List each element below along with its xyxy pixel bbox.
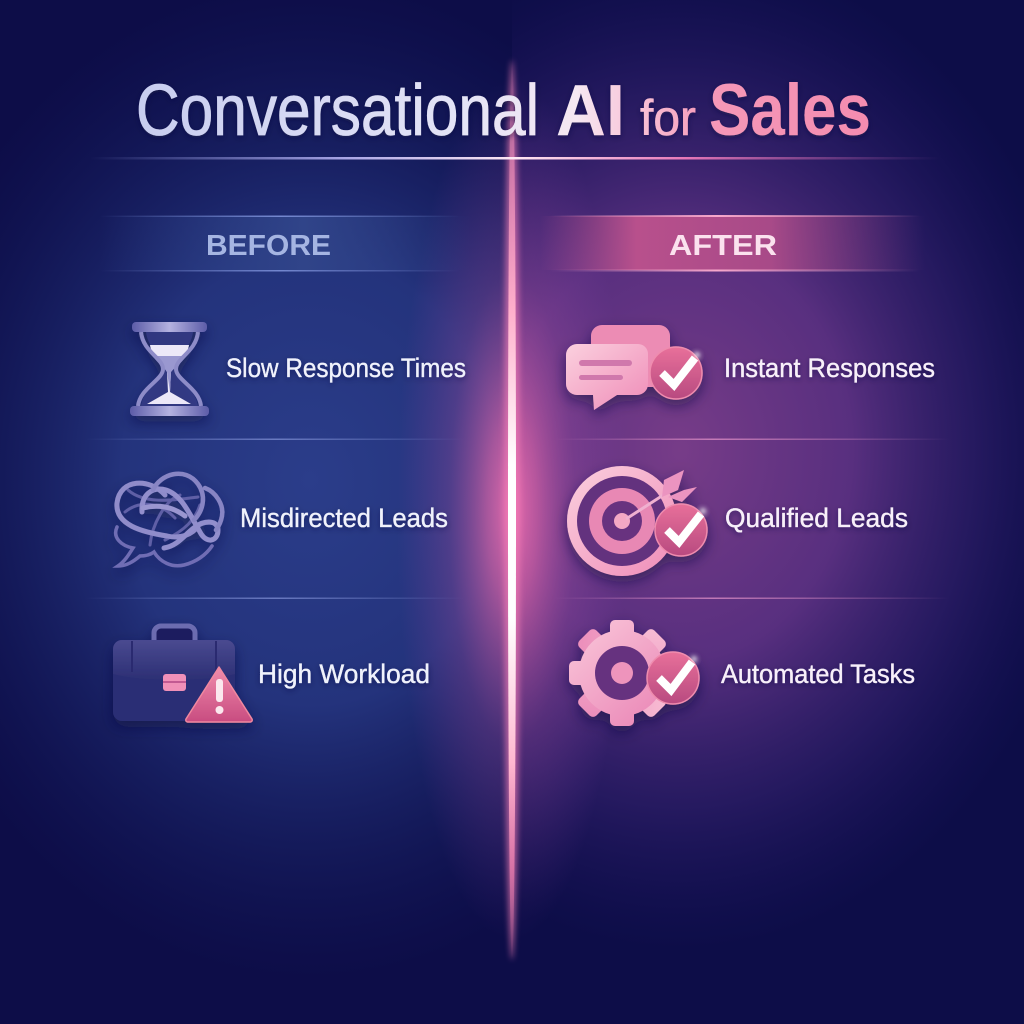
text: misdirected leads: Misdirected Leads — [240, 503, 448, 533]
title: Conversational — [136, 71, 539, 151]
title: AI — [556, 71, 625, 151]
title: for — [640, 90, 696, 146]
text: high workload: High Workload — [258, 659, 430, 689]
icon: gear with check — [569, 620, 699, 726]
icon: briefcase with warning — [113, 626, 252, 722]
text: qualified leads: Qualified Leads — [725, 503, 908, 533]
panel: after header: AFTER — [669, 230, 777, 262]
icon: hourglass — [130, 322, 209, 416]
icon: chat bubbles with check — [566, 325, 702, 410]
icon: target with check — [567, 466, 707, 576]
title underline — [90, 157, 940, 160]
text: automated tasks: Automated Tasks — [721, 659, 915, 689]
panel: after header — [540, 215, 925, 272]
text: instant responses: Instant Responses — [724, 353, 935, 383]
text: slow response times: Slow Response Times — [226, 353, 466, 383]
panel: before header — [100, 216, 470, 272]
central glowing divider — [504, 60, 520, 960]
title: Sales — [709, 70, 871, 151]
panel: before header: BEFORE — [206, 230, 331, 262]
title — [136, 70, 871, 151]
icon: tangled knot speech bubble — [116, 474, 222, 566]
